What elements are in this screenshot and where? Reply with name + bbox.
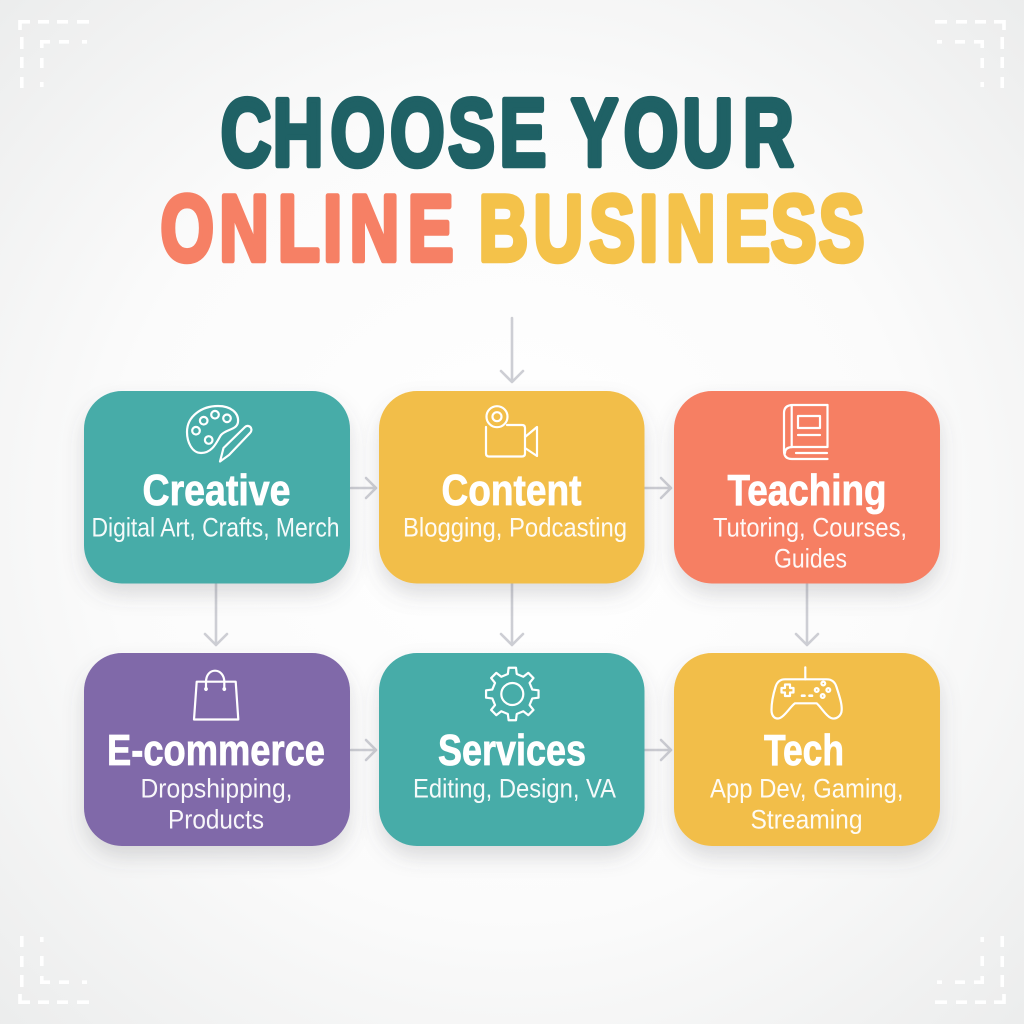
heading: tech: Tech [764,726,844,775]
icon: video camera [486,406,537,456]
heading: e-commerce: E-commerce [107,726,325,775]
arrow: e-commerce to services [351,740,376,760]
text: teaching examples: Guides [774,544,847,574]
icon: palette and pencil [187,406,251,462]
arrow: content to teaching [645,478,671,498]
corner marks: top right [935,22,1004,88]
text: creative examples: Digital Art, Crafts, Merch [92,513,340,543]
icon: game controller [772,667,842,719]
text: services examples: Editing, Design, VA [413,773,616,803]
text: tech examples [710,773,904,834]
title [161,78,865,281]
heading: creative: Creative [142,466,290,515]
text: teaching examples: Tutoring, Courses, [713,513,907,543]
text: e-commerce examples: Dropshipping, [140,773,292,803]
title line 1: CHOOSE YOUR [221,78,794,186]
arrow: content to services [501,584,523,645]
heading: content: Content [442,466,582,515]
text: tech examples: App Dev, Gaming, [710,773,904,803]
panel: teaching [674,391,940,584]
icon: shopping bag [194,671,238,720]
icon: book [784,405,828,459]
text: tech examples: Streaming [750,804,862,834]
heading: services: Services [438,726,586,775]
text: teaching examples [713,513,907,574]
title word: online: ONLINE [161,177,454,281]
arrow: creative to e-commerce [205,584,227,645]
title word: business: BUSINESS [479,177,865,281]
panel: services [379,653,644,846]
text: e-commerce examples [140,773,292,834]
arrow: teaching to tech [796,584,818,645]
arrow: creative to content [351,478,376,498]
corner marks: bottom right [935,936,1004,1002]
corner marks: bottom left [20,936,89,1002]
text: content examples: Blogging, Podcasting [403,513,627,543]
corner marks: top left [20,22,89,88]
icon: gear [486,668,539,720]
heading: teaching: Teaching [728,466,886,515]
panel: content [379,391,644,584]
arrow: services to tech [645,740,671,760]
panel: creative [84,391,350,584]
panel: e-commerce [84,653,350,846]
text: e-commerce examples: Products [168,804,264,834]
panel: tech [674,653,940,846]
arrow: top entry [501,318,523,382]
